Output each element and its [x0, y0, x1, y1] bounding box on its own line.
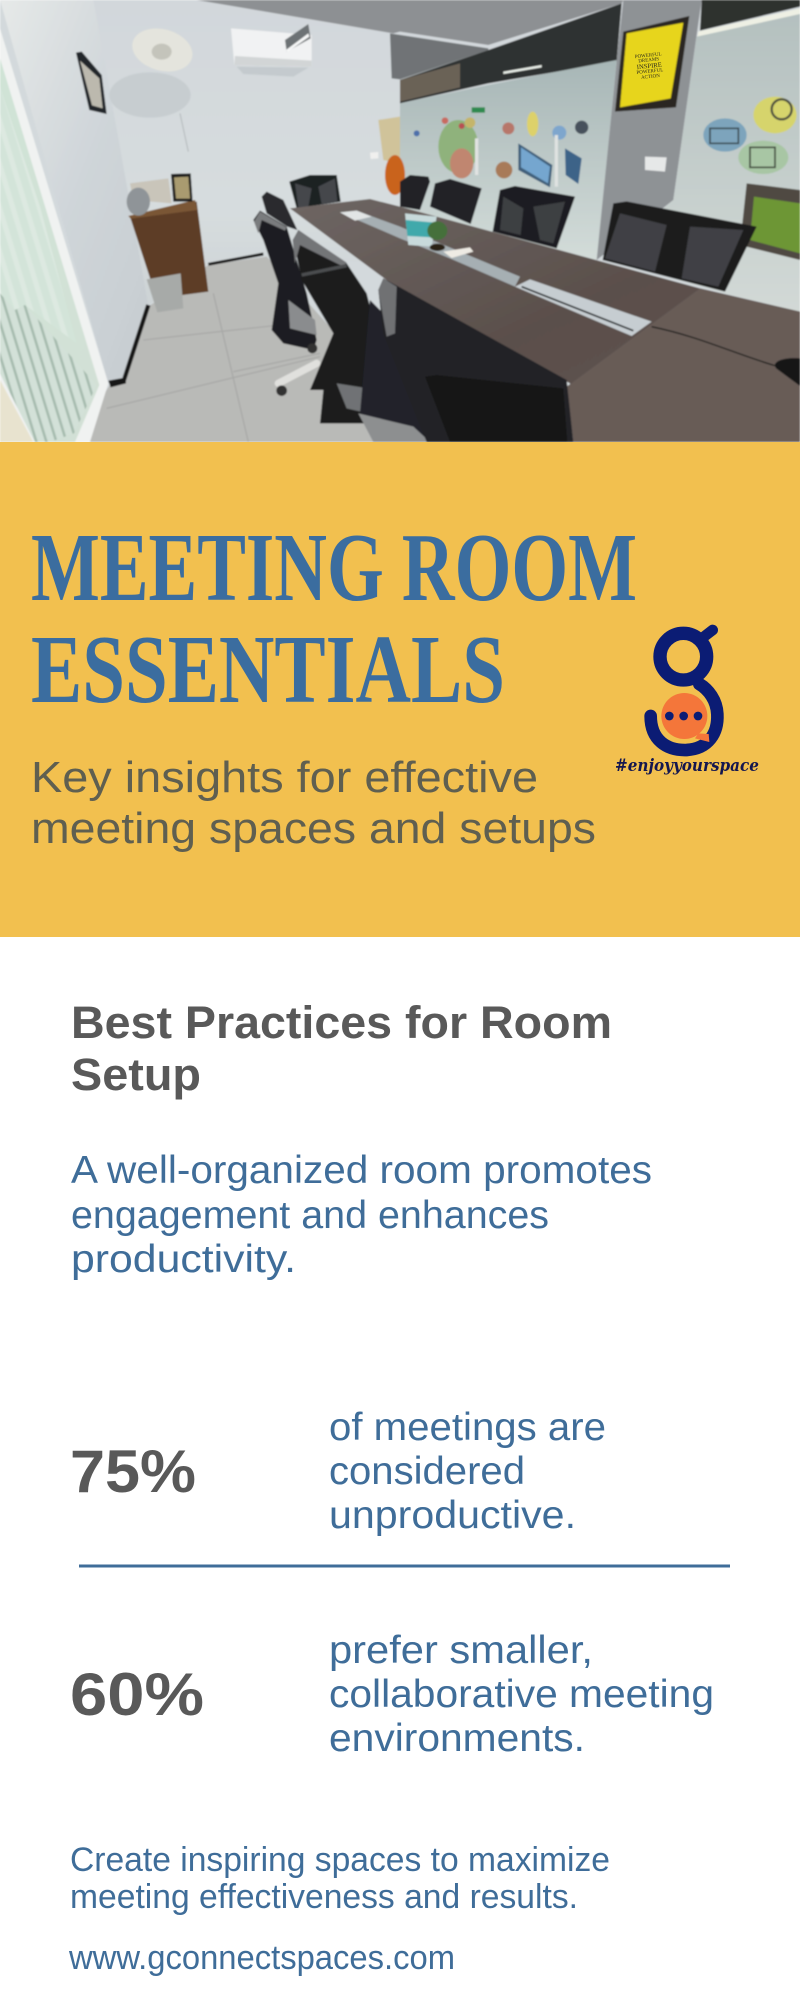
icon: gConnect logo: #enjoyyourspace — [615, 755, 759, 775]
right glass — [700, 0, 800, 31]
bin — [147, 273, 183, 312]
icon: gConnect logo — [615, 630, 759, 775]
poster wording: INSPIRE — [636, 62, 662, 71]
floor — [72, 257, 433, 442]
subtitle: Key insights for effective — [31, 753, 538, 802]
stat: 60 percent: environments. — [329, 1717, 585, 1760]
left side chairs — [262, 192, 297, 230]
near chair — [378, 278, 573, 442]
subtitle: meeting spaces and setups — [31, 804, 596, 853]
stat: 60 percent: 60% — [70, 1661, 204, 1728]
heading: best practices: Best Practices for Room — [71, 997, 612, 1048]
left glass frame — [0, 28, 108, 442]
stat: 60 percent: prefer smaller, — [329, 1629, 593, 1672]
panel: yellow header band — [0, 442, 800, 937]
stat: 60 percent — [70, 1629, 714, 1760]
table — [290, 199, 800, 442]
dried flowers — [378, 117, 400, 163]
skirting — [208, 254, 263, 264]
poster wording: ACTION — [641, 74, 661, 81]
poster wording: POWERFUL — [636, 68, 664, 76]
stat: 75 percent: considered — [329, 1450, 525, 1493]
yellow poster — [615, 16, 689, 112]
closing statement: Create inspiring spaces to maximize — [70, 1841, 610, 1879]
website url: www.gconnectspaces.com — [68, 1939, 455, 1977]
cable tray — [340, 211, 520, 287]
text block: room setup description: engagement and enhances — [71, 1194, 549, 1237]
text block: room setup description: productivity. — [71, 1238, 296, 1281]
far side chairs — [400, 175, 430, 210]
wall frame — [76, 52, 107, 114]
pillar — [597, 0, 702, 260]
title: ESSENTIALS — [31, 616, 505, 724]
stat: 75 percent: of meetings are — [329, 1406, 606, 1449]
closing statement: meeting effectiveness and results. — [70, 1878, 578, 1916]
stat: 75 percent: 75% — [70, 1438, 196, 1505]
poster wording: POWERFUL — [635, 52, 662, 60]
fan and shadow — [109, 72, 191, 118]
cabinet and items — [130, 202, 208, 298]
heading: best practices: Setup — [71, 1049, 201, 1100]
back wall — [93, 0, 667, 305]
glass decals — [414, 107, 588, 187]
closing statement — [70, 1841, 610, 1916]
far end chair — [289, 175, 341, 208]
stat: 75 percent: unproductive. — [329, 1494, 576, 1537]
poster wording — [635, 52, 664, 81]
bottles and plant — [405, 213, 437, 247]
glass partition — [400, 3, 622, 103]
cable and phone — [652, 327, 775, 366]
panel: meeting room photo — [0, 0, 800, 442]
stat: 60 percent: collaborative meeting — [329, 1673, 714, 1716]
poster wording: DREAMS — [638, 57, 660, 64]
text block: room setup description: A well-organized room promotes — [71, 1149, 652, 1192]
text block: room setup description — [71, 1149, 652, 1281]
AC unit — [231, 28, 312, 67]
stat: 75 percent — [70, 1406, 606, 1537]
subtitle — [31, 753, 596, 853]
ceiling bulkhead — [197, 0, 623, 45]
heading: best practices — [71, 997, 612, 1100]
chair base — [278, 363, 317, 383]
left wall — [0, 0, 148, 383]
title — [31, 514, 637, 724]
